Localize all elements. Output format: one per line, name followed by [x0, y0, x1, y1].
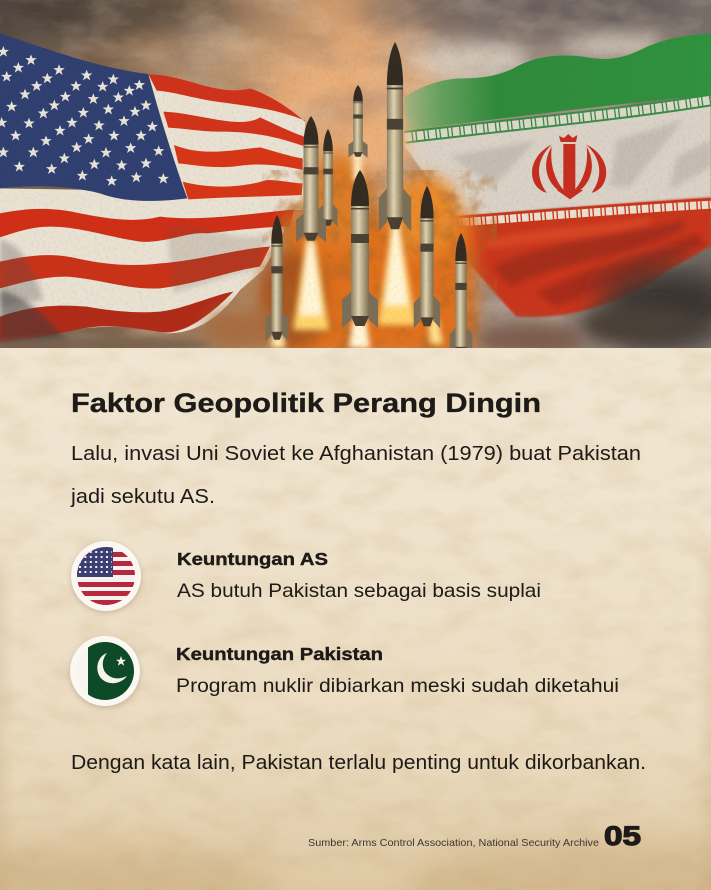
red stripe	[433, 197, 711, 317]
icon: Pakistan flag badge	[70, 636, 140, 708]
stripes	[0, 74, 305, 343]
white stripe folds	[450, 120, 711, 190]
item: Keuntungan AS: Keuntungan AS	[177, 549, 328, 569]
smoky sky	[0, 0, 711, 348]
green stripe	[405, 33, 711, 131]
source note: Sumber: Arms Control Association, National Security Archive	[308, 837, 599, 849]
conclusion text: Dengan kata lain, Pakistan terlalu penting untuk dikorbankan.	[71, 752, 646, 774]
page number: 05	[604, 821, 641, 851]
intro paragraph	[70, 442, 641, 508]
hero illustration: US and Iran flags with missiles	[0, 0, 711, 358]
rockets	[266, 42, 472, 356]
canton	[0, 33, 187, 201]
missiles	[266, 42, 472, 356]
flames	[271, 150, 443, 348]
flag shadows	[0, 226, 267, 348]
grain	[0, 0, 711, 348]
emblem	[532, 134, 606, 199]
item: Keuntungan Pakistan: Keuntungan Pakistan	[176, 644, 383, 664]
stars	[0, 46, 169, 186]
fire and smoke around missiles	[0, 110, 711, 358]
title: Faktor Geopolitik Perang Dingin	[71, 388, 541, 418]
US flag	[0, 33, 305, 348]
Iran flag	[405, 33, 711, 317]
item: Keuntungan Pakistan: Program nuklir dibiarkan meski sudah diketahui	[176, 675, 619, 697]
item: Keuntungan AS: AS butuh Pakistan sebagai basis suplai	[177, 580, 541, 602]
intro paragraph: jadi sekutu AS.	[70, 485, 215, 508]
item: Keuntungan AS	[177, 549, 541, 602]
intro paragraph: Lalu, invasi Uni Soviet ke Afghanistan (1979) buat Pakistan	[71, 442, 641, 465]
icon: US flag badge	[71, 541, 141, 613]
white stripe	[405, 100, 711, 217]
kufic border bands	[405, 100, 711, 224]
item: Keuntungan Pakistan	[176, 644, 619, 697]
